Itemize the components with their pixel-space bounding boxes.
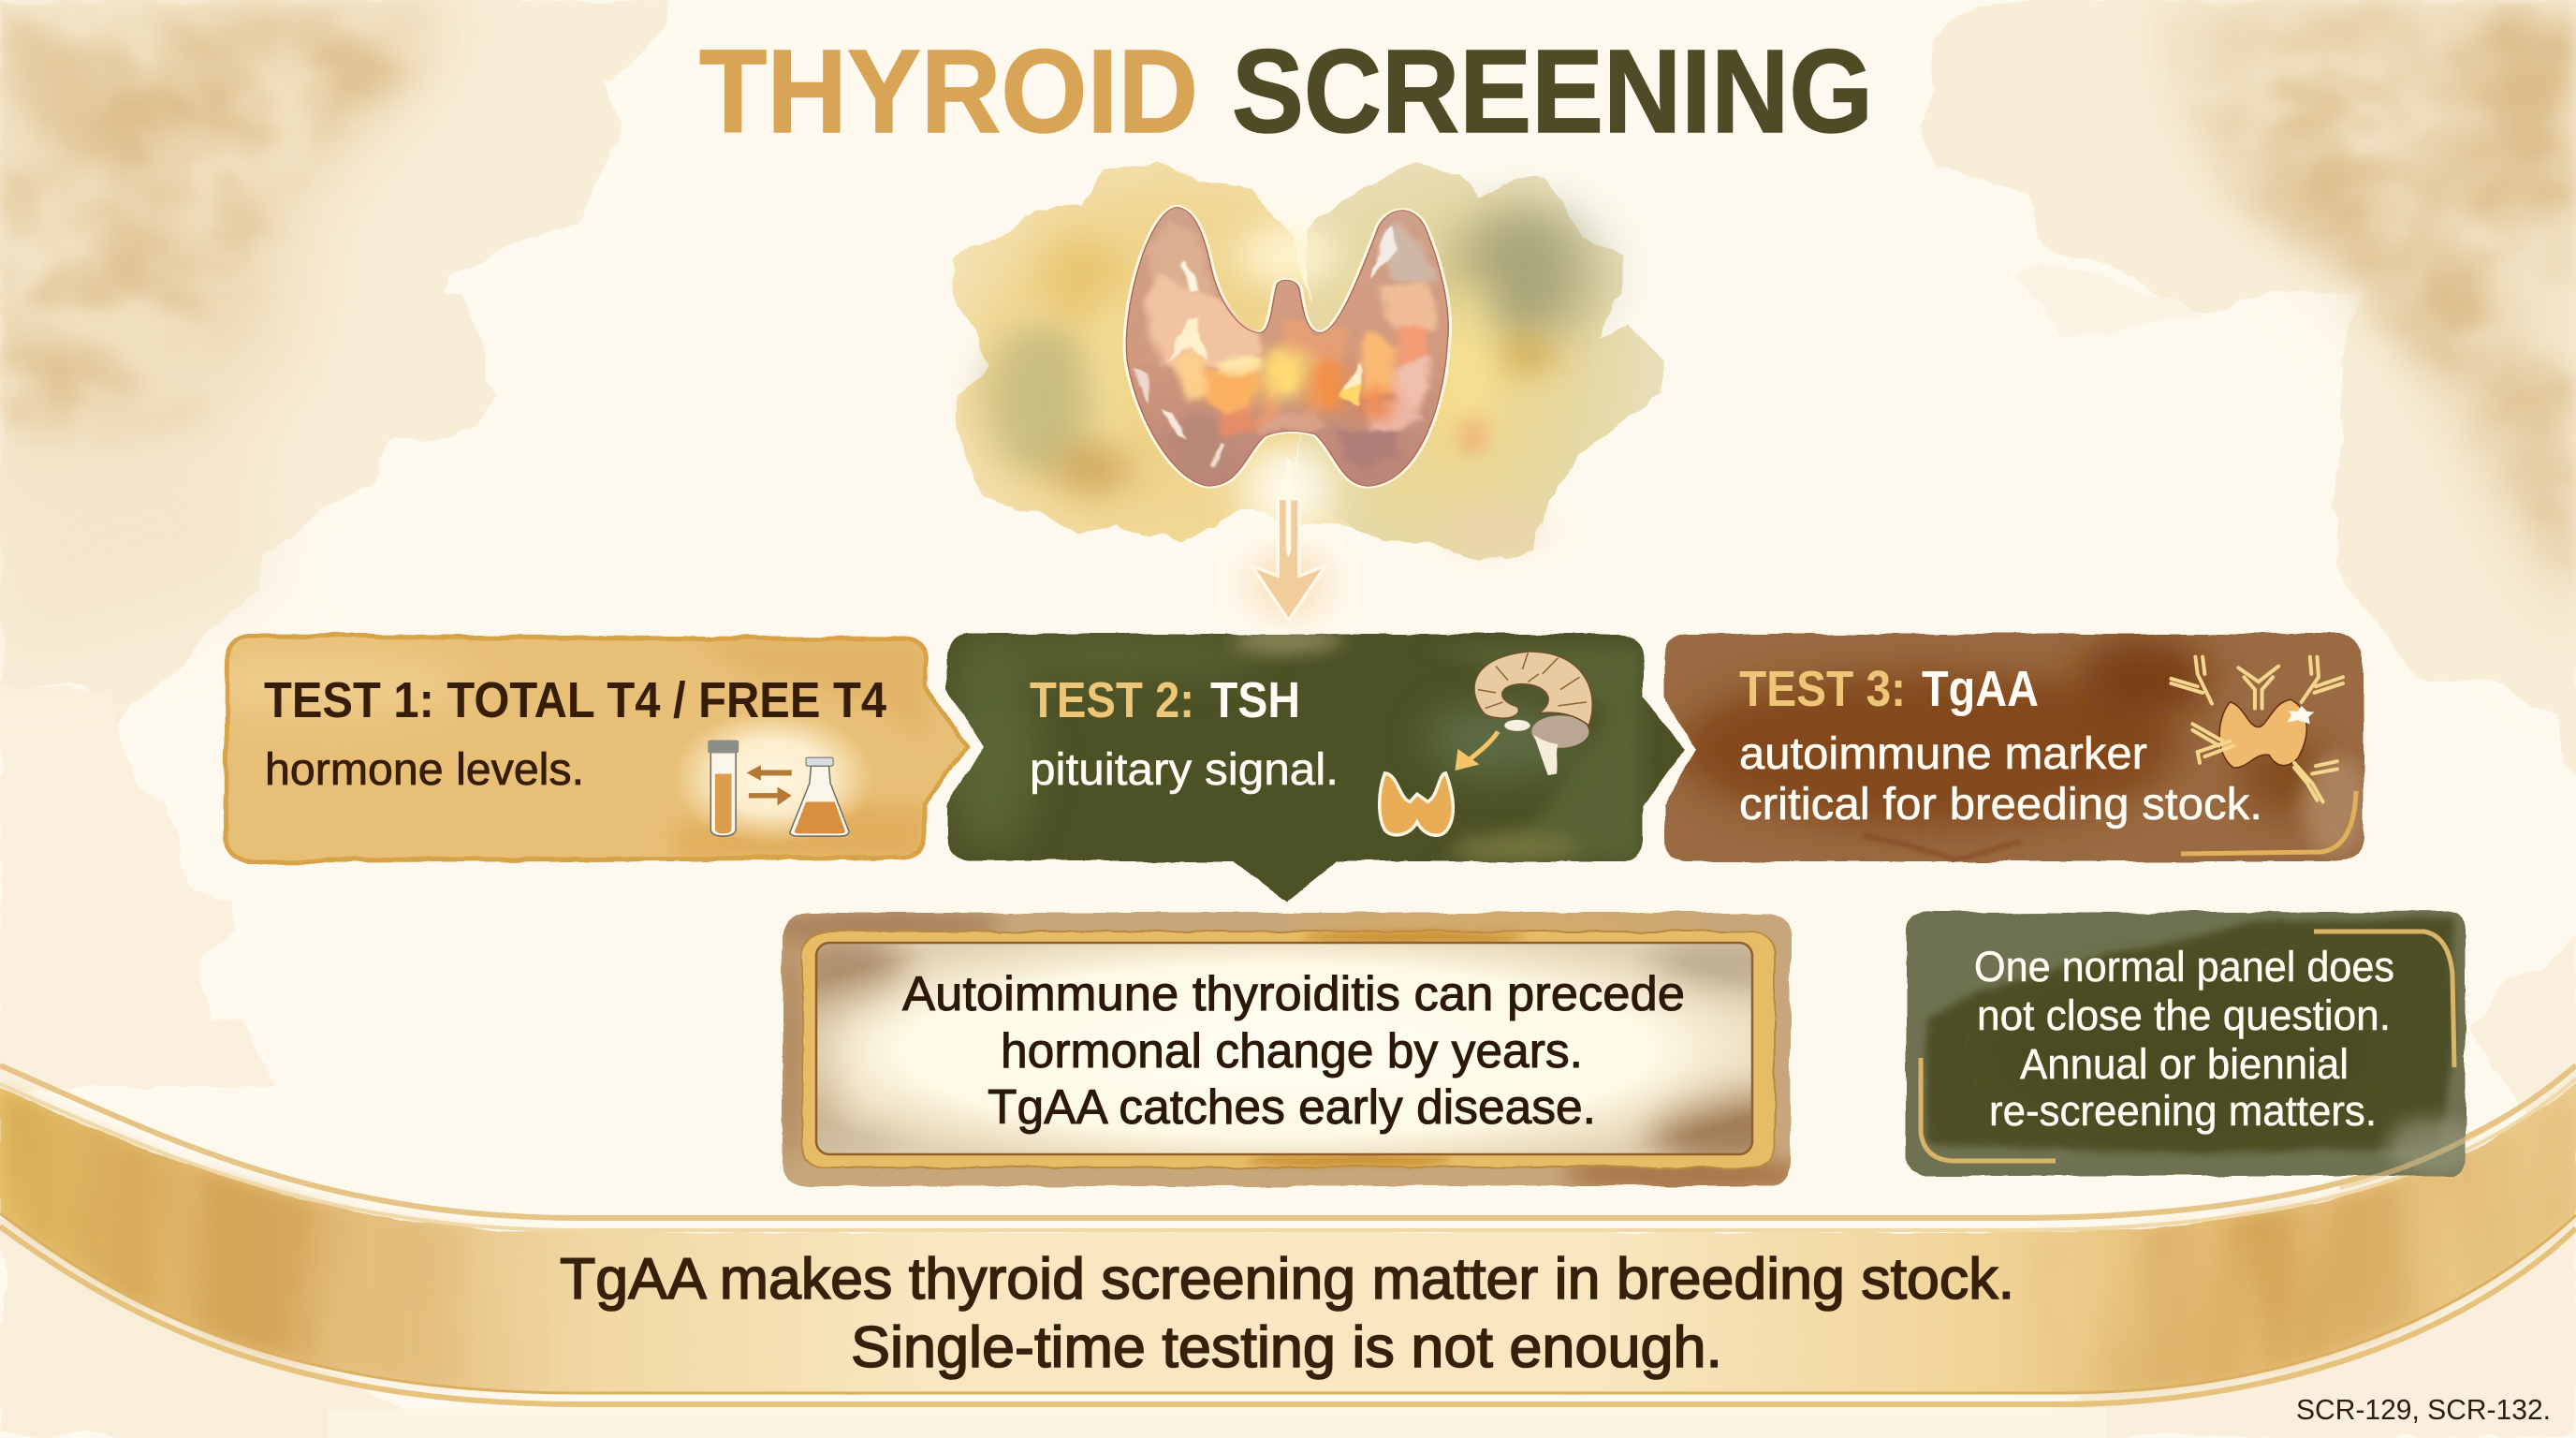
background wash: top-left watercolor stain bbox=[0, 0, 672, 1086]
bottom banner bbox=[0, 1065, 2576, 1404]
title: SCREENING bbox=[1232, 25, 1873, 157]
panel title: TgAA bbox=[1922, 661, 2039, 717]
icon: brain signalling to thyroid bbox=[1380, 652, 1592, 835]
panel title: TSH bbox=[1210, 672, 1300, 728]
banner text: Single-time testing is not enough. bbox=[851, 1315, 1722, 1380]
gold corner accents bbox=[2314, 932, 2454, 1067]
panel: test 2 TSH bbox=[945, 629, 1686, 901]
panel: test 3 TgAA bbox=[1664, 634, 2368, 861]
panel title: TEST 1: TOTAL T4 / FREE T4 bbox=[264, 672, 886, 728]
callout text bbox=[1974, 943, 2394, 1135]
title bbox=[699, 25, 1873, 157]
banner text: TgAA makes thyroid screening matter in breeding stock. bbox=[560, 1247, 2014, 1312]
panel subtitle: hormone levels. bbox=[265, 745, 584, 795]
callout text: Annual or biennial bbox=[2020, 1040, 2349, 1088]
callout: re-screening bbox=[1906, 911, 2481, 1176]
panel subtitle: autoimmune marker bbox=[1739, 729, 2147, 779]
title: THYROID bbox=[699, 25, 1198, 157]
panel subtitle: pituitary signal. bbox=[1030, 745, 1339, 795]
icon: antibodies attacking thyroid bbox=[2171, 657, 2343, 801]
banner text bbox=[560, 1247, 2014, 1380]
callout text: re-screening matters. bbox=[1989, 1087, 2377, 1135]
callout text: One normal panel does bbox=[1974, 943, 2394, 990]
callout text: Autoimmune thyroiditis can precede bbox=[902, 967, 1685, 1021]
panel subtitle bbox=[1739, 729, 2262, 829]
gold corner accent bbox=[2181, 791, 2356, 854]
callout inner parchment bbox=[817, 944, 1751, 1153]
callout text: not close the question. bbox=[1977, 991, 2391, 1039]
background wash: lower corners bbox=[0, 936, 2576, 1438]
panel title bbox=[1030, 672, 1300, 728]
panel: test 1 total T4 / free T4 bbox=[168, 634, 969, 863]
background wash: top-right watercolor stain bbox=[1923, 0, 2576, 783]
source note: SCR-129, SCR-132. bbox=[2296, 1393, 2551, 1426]
callout text: hormonal change by years. bbox=[1001, 1024, 1583, 1078]
panel title: TEST 2: bbox=[1030, 672, 1194, 728]
panel title bbox=[1739, 661, 2039, 717]
panel title: TEST 3: bbox=[1739, 661, 1906, 717]
callout text bbox=[902, 967, 1685, 1135]
thyroid illustration with watercolor splash bbox=[950, 160, 1661, 563]
callout text: TgAA catches early disease. bbox=[988, 1080, 1596, 1135]
arrow: thyroid to tests bbox=[1252, 459, 1325, 620]
callout: autoimmune thyroiditis bbox=[781, 910, 1792, 1188]
panel subtitle: critical for breeding stock. bbox=[1739, 780, 2262, 829]
gold frame bbox=[803, 932, 1775, 1167]
icon: test tube, flask and exchange arrows bbox=[708, 741, 849, 836]
